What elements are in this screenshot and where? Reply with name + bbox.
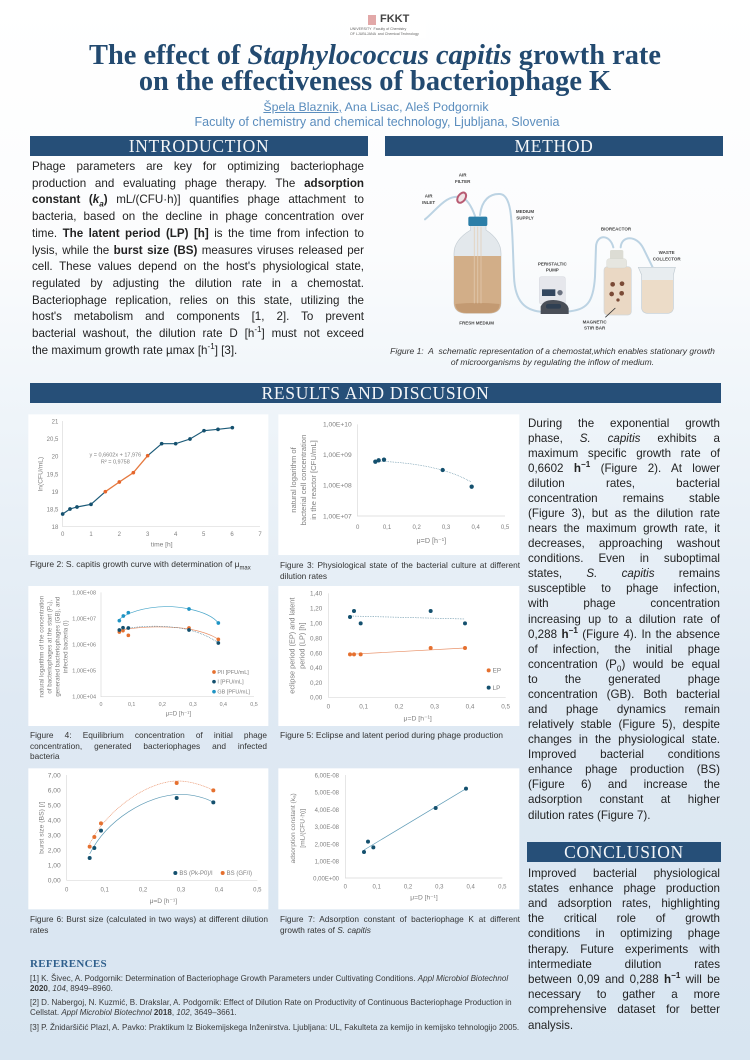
text: results discussion: conditions. Even in suboptimal	[528, 552, 720, 565]
data points	[362, 787, 468, 854]
diagram labels: BIOREACTOR	[601, 226, 632, 231]
text: results discussion: decreases, approaching washout	[528, 537, 720, 550]
y axis labels: 1,00E+08	[72, 590, 96, 596]
diagram labels: MEDIUM	[516, 209, 534, 214]
trend lines	[90, 794, 213, 854]
x axis labels: 3	[146, 532, 150, 538]
x axis labels: 0,3	[442, 525, 451, 531]
x axis labels: 0	[344, 885, 348, 891]
y axis labels: 7,00	[48, 772, 61, 779]
text: conclusion: intermediate dilution rates	[528, 958, 720, 971]
chart: figure 7 adsorption constant	[278, 768, 520, 910]
heading: introduction	[30, 136, 368, 156]
text: results discussion: maximum specific growth rate of	[528, 447, 720, 460]
x axis labels: 0,4	[466, 704, 475, 711]
x axis labels: μ=D [h⁻¹]	[417, 537, 446, 545]
y axis labels: 6,00E-08	[315, 773, 340, 779]
x axis labels: 0,1	[383, 525, 392, 531]
diagram labels: STIR BAR	[584, 326, 606, 331]
x axis labels: 0,1	[372, 885, 381, 891]
regression equation: y = 0,6602x + 17,976	[89, 453, 141, 459]
x axis labels: 5	[202, 532, 206, 538]
y axis labels: 4,00	[48, 817, 61, 824]
y axis labels: 1,00E+05	[72, 668, 96, 674]
legend	[487, 668, 501, 692]
y axis labels: 19	[52, 490, 59, 496]
x axis labels: 4	[174, 532, 178, 538]
x axis labels: 0,2	[395, 704, 404, 711]
y axis labels: 1,00E+08	[323, 483, 352, 490]
text: results discussion: and phage dynamics remain	[528, 703, 720, 716]
text: introduction: host's metabolism and components [1, 2]. To prevent	[32, 310, 364, 323]
diagram labels: FILTER	[455, 179, 471, 184]
icon: air filter	[455, 191, 468, 204]
text: results discussion: with phage concentration	[528, 597, 720, 610]
x axis labels	[38, 457, 262, 549]
x axis labels: 7	[258, 532, 262, 538]
text: introduction: regulated by adjusting the dilution rate in a chemostat.	[32, 277, 364, 290]
y axis title	[289, 435, 318, 525]
x axis labels: 0,4	[215, 887, 224, 893]
title	[89, 40, 661, 96]
y axis labels: 5,00E-08	[315, 791, 340, 797]
caption: figure 2: Figure 2: S. capitis growth curve with determination of μmax	[30, 559, 251, 572]
y axis labels: 18	[52, 525, 59, 531]
y axis title: natural logarithm of	[289, 446, 298, 513]
y axis labels	[48, 772, 61, 885]
text: results discussion: (Figure 6) and increase the	[528, 778, 720, 791]
x axis labels: 0,5	[501, 525, 510, 531]
x axis labels: 0	[61, 532, 65, 538]
y axis labels	[323, 422, 352, 520]
x axis labels: μ=D [h⁻¹]	[150, 898, 177, 905]
caption: figure 6: rates	[30, 925, 48, 935]
diagram labels: MAGNETIC	[583, 320, 607, 325]
y axis labels: 0,00	[48, 878, 61, 885]
caption: figure 1	[390, 346, 715, 367]
series blue	[88, 796, 215, 860]
x axis labels: 0,4	[471, 525, 480, 531]
x axis labels: 0,2	[412, 525, 421, 531]
x axis labels: μ=D [h⁻¹]	[404, 715, 432, 722]
caption: figure 4	[30, 730, 267, 761]
x axis labels: ln(CFU/mL)	[38, 457, 45, 491]
x axis labels: 0,3	[189, 702, 197, 708]
x axis labels	[356, 525, 510, 545]
y axis labels: 3,00	[48, 833, 61, 840]
y axis title	[38, 595, 69, 697]
y axis labels: 21	[52, 419, 59, 425]
reference 2: [2] D. Nabergoj, N. Kuzmić, B. Drakslar, A. Podgornik: Effect of Dilution Rate on Productivity of Continuous Bacteriophage Production in	[30, 998, 512, 1007]
caption: figure 4: concentration, generated bacteriophages and infected	[30, 741, 267, 751]
heading: results: RESULTS AND DISCUSION	[262, 383, 489, 403]
y axis labels: 2,00	[48, 848, 61, 855]
x axis labels	[100, 702, 258, 717]
y axis labels: 1,00E+04	[72, 695, 96, 701]
x axis labels: 6	[230, 532, 234, 538]
x axis labels: 0,5	[498, 885, 507, 891]
text: introduction: Bacteriophage replication, relies on this state, utilizing the	[32, 294, 364, 307]
diagram labels: INLET	[422, 200, 435, 205]
reference 1: [1] K. Šivec, A. Podgornik: Determination of Bacteriophage Growth Parameters under Cultivating Conditions. Appl Microbiol Biotechnol	[30, 974, 508, 983]
x axis labels: 0,5	[501, 704, 511, 711]
heading: conclusion	[527, 842, 721, 862]
chart: figure 4 equilibrium concentration	[28, 586, 268, 726]
text: conclusion: and adsorption rates, highlighting	[528, 897, 720, 910]
y axis title: bacterial cell concentration	[299, 435, 308, 525]
caption: figure 7: growth rates of S. capitis	[280, 925, 371, 935]
icon: waste collector beaker	[638, 267, 675, 313]
series orange	[88, 781, 215, 849]
caption: figure 1: Figure 1: A schematic representation of a chemostat,which enables stationary growth	[390, 346, 715, 356]
y axis labels: 0,80	[310, 635, 323, 642]
text: results discussion: concentration (P0) would be equal	[528, 658, 720, 673]
reference 1: 2020, 104, 8949–8960.	[30, 984, 113, 993]
heading: introduction: INTRODUCTION	[129, 136, 269, 156]
caption: figure 7: Figure 7: Adsorption constant of bacteriophage K at different	[280, 914, 520, 924]
diagram labels: AIR	[459, 173, 467, 178]
text: conclusion: comprehensive dataset for better	[528, 1003, 720, 1016]
y axis labels	[310, 591, 323, 702]
x axis labels: 0,5	[253, 887, 262, 893]
y axis labels: 1,40	[310, 591, 323, 598]
caption: figure 3: dilution rates	[280, 571, 327, 581]
diagram labels: WASTE	[659, 250, 675, 255]
caption: figure 5: Figure 5: Eclipse and latent period during phage production	[280, 730, 503, 740]
y axis labels: 20,5	[47, 437, 59, 443]
heading: method	[385, 136, 723, 156]
y axis title: eclipse period (EP) and latent	[287, 598, 296, 694]
y axis title: of bacteriophages at the start (P₀),	[46, 599, 53, 694]
caption: figure 7	[280, 914, 520, 935]
logo	[349, 9, 426, 38]
text: results discussion: 0,288 h−1 (Figure 4). In the absence	[528, 626, 720, 641]
text: results discussion: to the generated phage	[528, 673, 720, 686]
y axis labels: 0,20	[310, 680, 323, 687]
y axis title	[290, 793, 306, 863]
diagram labels: FRESH MEDIUM	[459, 321, 494, 326]
caption: figure 4: bacteria	[30, 751, 60, 761]
text: introduction: Phage parameters are key for optimizing bacteriophage	[32, 160, 364, 173]
x axis labels: 0,1	[100, 887, 109, 893]
text: conclusion	[528, 866, 720, 1032]
x axis labels: 0	[327, 704, 331, 711]
x axis labels: μ=D [h⁻¹]	[410, 895, 438, 902]
y axis title: natural logarithm of the concentration	[38, 595, 45, 697]
heading: method: METHOD	[514, 136, 594, 156]
text: conclusion: states enhance phage production	[528, 882, 720, 895]
text: results discussion: Improved bacterial conditions	[528, 748, 720, 761]
y axis labels	[47, 419, 59, 531]
y axis labels: 0,00	[310, 695, 323, 702]
x axis labels: 0,2	[159, 702, 166, 708]
logo small text: UNIVERSITY Faculty of Chemistry	[350, 27, 406, 31]
icon: university mark	[368, 15, 376, 25]
y axis labels: 19,5	[47, 472, 59, 478]
x axis labels: 0	[65, 887, 69, 893]
y axis labels: 0,00E+00	[313, 876, 340, 882]
caption: figure 1: of microorganisms by regulating the inflow of medium.	[451, 357, 654, 367]
text: introduction: cell. These values depend on the host's physiological state,	[32, 260, 364, 273]
text: conclusion: necessary to gather a more	[528, 988, 720, 1001]
diagram labels: SUPPLY	[516, 215, 534, 220]
heading: results	[30, 383, 721, 403]
trend line	[375, 461, 472, 482]
y axis labels	[72, 590, 96, 701]
diagram labels: PUMP	[546, 267, 559, 272]
y axis labels: 2,00E-08	[315, 842, 340, 848]
x axis labels: time [h]	[151, 542, 173, 549]
caption: figure 3	[280, 560, 520, 581]
text: results discussion: 0,6602 h−1 (Figure 2). At lower	[528, 460, 720, 475]
text: introduction: constant (ka) mL/(CFU·h)] quantifies phage attachment to	[32, 193, 364, 209]
series LP	[348, 609, 467, 625]
text: conclusion: conditions in optimizing phage	[528, 927, 720, 940]
text: introduction: bacteria, based on the decline in phage concentration over	[32, 210, 364, 223]
text: results discussion: concentration remains stable	[528, 492, 720, 505]
y axis labels: 1,00	[48, 863, 61, 870]
y axis labels: 1,00E+07	[323, 513, 352, 520]
logo small text: OF LJUBLJANA and Chemical Technology	[350, 32, 419, 36]
y axis title: [mL/(CFU·h)]	[299, 809, 306, 848]
title: The effect of Staphylococcus capitis growth rate	[89, 40, 661, 71]
text: introduction: lysis, while the burst size (BS) measures viruses released per	[32, 244, 364, 257]
heading: conclusion: CONCLUSION	[564, 842, 684, 862]
legend: GB [PFU/mL]	[217, 690, 251, 696]
caption: figure 4: Figure 4: Equilibrium concentration of initial phage	[30, 730, 267, 740]
y axis labels: 1,00E+10	[323, 422, 352, 429]
y axis labels: 1,20	[310, 606, 323, 613]
authors: Špela Blaznik, Ana Lisac, Aleš Podgornik	[263, 100, 489, 114]
text: introduction	[32, 160, 364, 357]
legend	[173, 871, 252, 877]
y axis labels: 20	[52, 455, 59, 461]
y axis labels: 6,00	[48, 787, 61, 794]
series PII	[118, 626, 220, 641]
x axis labels: 2	[118, 532, 122, 538]
data points	[373, 458, 474, 489]
reference 1	[30, 974, 508, 993]
text: results discussion: dilution rates (Figure 7).	[528, 809, 650, 822]
diagram labels: COLLECTOR	[653, 256, 681, 261]
text: conclusion: analysis.	[528, 1019, 573, 1032]
x axis labels: burst size (BS) [/]	[38, 801, 45, 854]
legend: EP	[493, 668, 501, 675]
y axis labels: 18,5	[47, 508, 59, 514]
y axis labels: 1,00E+09	[323, 452, 352, 459]
text: results discussion: concentration (GB). Both bacterial	[528, 688, 720, 701]
trend lines	[119, 607, 218, 643]
icon: peristaltic pump	[539, 277, 569, 314]
icon: fresh medium bottle	[454, 217, 501, 313]
chart: figure 3 physiological state	[278, 414, 520, 555]
affiliation: Faculty of chemistry and chemical technology, Ljubljana, Slovenia	[194, 115, 560, 129]
text: conclusion: between 0,09 and 0,288 h−1 will be	[528, 971, 720, 986]
diagram labels: AIR	[425, 194, 433, 199]
x axis labels	[327, 704, 511, 722]
trend lines	[350, 616, 465, 619]
x axis labels	[38, 801, 262, 905]
x axis labels: 1	[89, 532, 93, 538]
series I	[118, 626, 220, 645]
growth series	[61, 426, 234, 516]
x axis labels: 0,4	[220, 702, 227, 708]
legend: I [PFU/mL]	[217, 680, 244, 686]
y axis title: in the reactor [CFU/mL]	[309, 440, 318, 520]
chart: figure 5 eclipse and latent period	[278, 586, 520, 726]
x axis labels: 0,3	[177, 887, 186, 893]
title: on the effectiveness of bacteriophage K	[139, 66, 611, 96]
y axis labels: 5,00	[48, 802, 61, 809]
legend: PII [PFU/mL]	[217, 670, 249, 676]
text: introduction: production and evaluating phage therapy. The adsorption	[32, 177, 364, 190]
x axis labels: 0,3	[435, 885, 444, 891]
x axis labels	[344, 885, 507, 902]
series GB	[118, 607, 220, 625]
y axis title: generated bacteriophages (GB), and	[54, 596, 61, 697]
x axis labels: 0,1	[359, 704, 369, 711]
caption: figure 3: Figure 3: Physiological state of the bacterial culture at different	[280, 560, 520, 570]
caption: figure 6	[30, 914, 268, 935]
text: introduction: the maximum growth rate µmax [h-1] [3].	[32, 342, 237, 357]
y axis title: infected bacteria (I)	[62, 620, 69, 673]
diagram labels	[422, 173, 681, 331]
chart: figure 6 burst size	[28, 768, 268, 910]
tubing	[425, 194, 653, 312]
logo small text	[350, 27, 419, 36]
x axis labels: 0,3	[430, 704, 440, 711]
y axis labels: 1,00E+06	[72, 642, 96, 648]
text: results discussion: phase, S. capitis exhibits a	[528, 432, 720, 445]
y axis title: adsorption constant (kₐ)	[290, 793, 297, 863]
y axis labels: 1,00E+07	[72, 616, 96, 622]
text: conclusion: therapy. Future experiments with	[528, 943, 720, 956]
text: results discussion: relatively stable (Figure 5), despite	[528, 718, 720, 731]
legend: BS (Pk-P0)/I	[179, 871, 213, 877]
text: introduction: time. The latent period (LP) [h] is the time from infection to	[32, 227, 364, 240]
reference 2	[30, 998, 512, 1017]
text: results discussion: susceptible to phage infection,	[528, 582, 720, 595]
regression equation: R² = 0,9758	[101, 460, 130, 466]
text: results discussion: During the exponential growth	[528, 416, 720, 430]
x axis labels: μ=D [h⁻¹]	[166, 710, 191, 717]
text: results discussion: (Figure 3), but as the dilution rate	[528, 507, 720, 520]
text: results discussion	[528, 416, 720, 822]
text: results discussion: enhance phage production (BS)	[528, 763, 720, 776]
logo wordmark: FKKT	[380, 13, 409, 25]
x axis labels: 0,4	[466, 885, 475, 891]
legend: LP	[493, 685, 500, 692]
y axis labels: 0,40	[310, 665, 323, 672]
y axis labels: 3,00E-08	[315, 825, 340, 831]
text: results discussion: states, S. capitis remains	[528, 567, 720, 580]
y axis labels: 1,00	[310, 621, 323, 628]
trend line	[364, 789, 466, 850]
y axis title: period (LP) [h]	[297, 622, 306, 669]
text: results discussion: of infection, the initial phage	[528, 643, 720, 656]
reference 3: [3] P. Žnidaršičić Plazl, A. Pavko: Praktikum Iz Biokemijskega Inženirstva. Ljubljana: UL, Fakulteta za kemijo in kemijsko tehnologijo 2005.	[30, 1023, 519, 1032]
x axis labels: 0,5	[250, 702, 258, 708]
text: results discussion: changes in the physiological state.	[528, 733, 720, 746]
text: introduction: bacterial washout, the dilution rate D [h-1] must not exceed	[32, 325, 364, 340]
chart: figure 2 growth curve	[28, 414, 268, 555]
legend: BS (GF/I)	[227, 871, 252, 877]
regression equation	[89, 453, 141, 466]
text: results discussion: nears the maximum growth rate, it	[528, 522, 720, 535]
y axis labels: 0,60	[310, 650, 323, 657]
y axis labels: 1,00E-08	[315, 859, 340, 865]
x axis labels: 0	[356, 525, 360, 531]
y axis title	[287, 598, 306, 694]
heading: references: REFERENCES	[30, 958, 107, 970]
figure 1: chemostat schematic	[422, 173, 681, 331]
legend	[212, 670, 251, 696]
x axis labels: 0,2	[139, 887, 148, 893]
text: results discussion: adsorption constant at higher	[528, 793, 720, 806]
reference 2: Cellstat. Appl Microbiol Biotechnol 2018, 102, 3649–3661.	[30, 1008, 237, 1017]
text: results discussion: increasing up to a dilution rate of	[528, 613, 720, 626]
diagram labels: PERISTALTIC	[538, 261, 567, 266]
y axis labels	[313, 773, 340, 882]
x axis labels: 0,2	[404, 885, 413, 891]
x axis labels: 0,1	[128, 702, 135, 708]
series EP	[348, 646, 467, 656]
text: results discussion: dilution rates, bacterial	[528, 477, 720, 490]
y axis labels: 4,00E-08	[315, 808, 340, 814]
icon: bioreactor	[604, 250, 631, 317]
text: conclusion: the critical role of growth	[528, 912, 720, 925]
x axis labels: 0	[100, 702, 103, 708]
text: conclusion: Improved bacterial physiological	[528, 866, 720, 880]
caption: figure 6: Figure 6: Burst size (calculated in two ways) at different dilution	[30, 914, 268, 924]
